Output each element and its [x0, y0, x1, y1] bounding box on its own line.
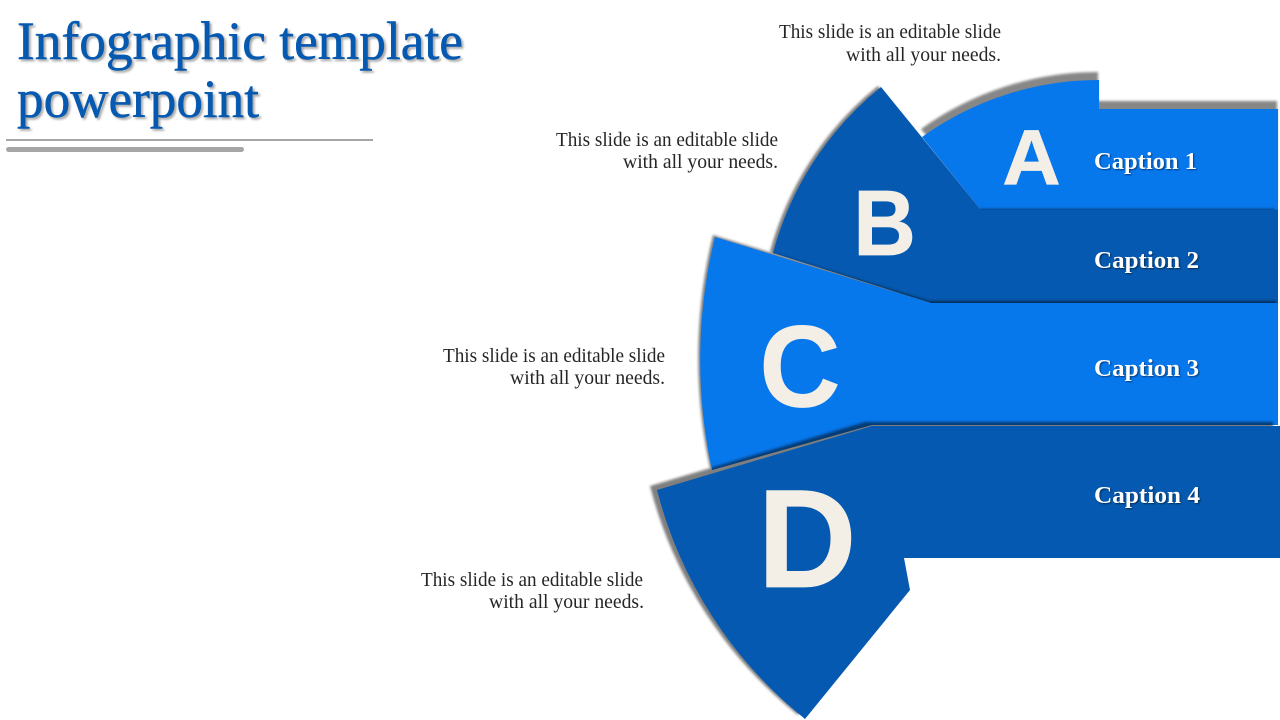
caption 2: Caption 2 [1094, 248, 1199, 274]
segment B shape [773, 87, 1278, 303]
description text D [421, 569, 644, 613]
description text A: This slide is an editable slide [779, 21, 1001, 43]
description text A [779, 21, 1001, 66]
description text C: This slide is an editable slide [443, 345, 665, 367]
title underline [6, 139, 373, 152]
caption 4: Caption 4 [1094, 483, 1200, 509]
caption 3: Caption 3 [1094, 356, 1199, 382]
letter A: A [1002, 113, 1061, 201]
description text D: This slide is an editable slide [421, 569, 643, 591]
description text D: with all your needs. [489, 591, 644, 613]
description text B: This slide is an editable slide [556, 129, 778, 151]
segment C shape [700, 237, 1278, 470]
panel: segment A [922, 80, 1278, 210]
description text A: with all your needs. [846, 44, 1001, 66]
description text C: with all your needs. [510, 367, 665, 389]
description text C [443, 345, 665, 389]
letter D: D [758, 462, 857, 617]
title: Infographic template [17, 11, 463, 71]
title: powerpoint [17, 69, 259, 129]
segment A shape [922, 80, 1278, 210]
letter B: B [853, 172, 916, 276]
segment D shape [657, 426, 1280, 719]
panel: segment C [700, 237, 1278, 470]
description text B: with all your needs. [623, 151, 778, 173]
caption 1: Caption 1 [1094, 149, 1197, 175]
panel: segment B [773, 87, 1278, 303]
panel: segment D [657, 426, 1280, 719]
letter C: C [760, 303, 840, 432]
title [17, 11, 463, 129]
description text B [556, 129, 778, 173]
